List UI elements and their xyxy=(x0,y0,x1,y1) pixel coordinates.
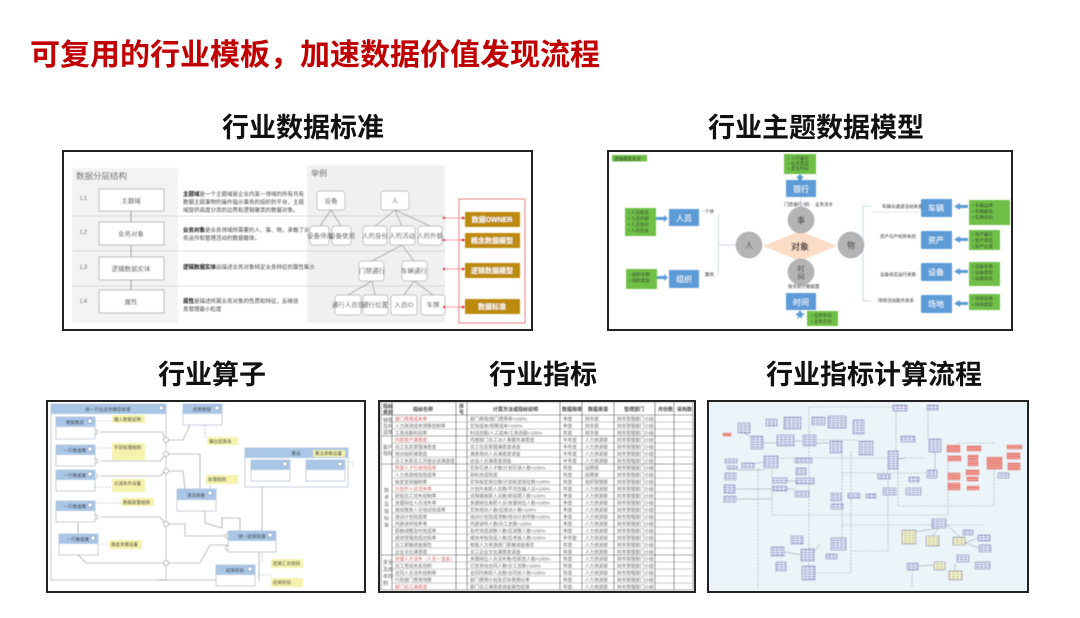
yellow notes: 算法参数设置 xyxy=(315,450,342,457)
indicator rows: 财务管理部门小组 xyxy=(617,562,654,570)
yellow notes: 维度关联设置 xyxy=(111,541,138,548)
indicator rows: 人力资源部 xyxy=(585,492,608,500)
indicator rows: 年度 xyxy=(563,478,573,486)
indicator rows: 半年度 xyxy=(563,450,577,458)
heading: 行业数据标准: 行业数据标准 xyxy=(222,113,384,143)
indicator rows: 财务管理部门小组 xyxy=(617,570,654,576)
layer structure column: L1 xyxy=(80,195,88,202)
indicator rows: 关键人才流失（人员一览表） xyxy=(395,556,455,562)
relation labels: 个体 xyxy=(705,208,714,215)
category column xyxy=(383,417,393,587)
layer descriptions: 主题域是一个主题域是企业内某一领域的所有共有 xyxy=(183,190,305,198)
green attribute notes: • 人行编号 xyxy=(788,155,809,162)
indicator rows: 财务管理部门小组 xyxy=(617,548,654,556)
indicator rows: 季度 xyxy=(563,500,573,506)
table header: 数据来源 xyxy=(588,406,608,413)
indicator rows: 财务管理部门小组 xyxy=(617,534,654,542)
red output tables xyxy=(723,433,1022,490)
green attribute notes: • 资产类型 xyxy=(972,237,993,244)
indicator rows: 合同内离职人员数/合同总人数×100% xyxy=(470,570,545,576)
indicator rows: 财务管理部门小组 xyxy=(617,422,654,430)
indicator rows: 工资总额利润率 xyxy=(395,430,428,436)
indicator rows: 财务管理部门小组 xyxy=(617,576,654,584)
indicator rows: 访谈人员满意度调查 xyxy=(470,458,512,464)
indicator rows: 行政部门费用预算 xyxy=(395,576,432,584)
indicator rows: 实际核定岗位数/计划核定岗位数×100% xyxy=(470,478,550,486)
indicator rows: 季度 xyxy=(563,416,573,422)
red connectors xyxy=(443,217,465,308)
indicator rows: 年度 xyxy=(563,464,573,472)
indicator rows: 计划外人员流失率 xyxy=(395,486,432,492)
indicator rows: 财务管理部门小组 xyxy=(617,472,654,478)
layer structure column: 数据分层结构 xyxy=(76,171,127,181)
operator boxes: 统一结果处理 xyxy=(238,533,266,540)
indicator rows: 财务部 xyxy=(585,430,599,436)
indicator rows: 绩效考核完成人数/应考核人数×100% xyxy=(470,534,545,542)
category column: 制 xyxy=(383,580,388,587)
indicator rows: 年度人才引进完成率 xyxy=(395,464,437,472)
green attribute notes: • 组织名称 xyxy=(629,271,650,278)
layer structure column: 业务对象 xyxy=(118,229,144,238)
indicator rows: 人力资源部 xyxy=(585,548,608,556)
category column: 及利 xyxy=(383,423,393,430)
layer descriptions: 域提供高度分类的边界和逻辑聚类的数据对象。 xyxy=(183,206,299,214)
relation labels: 车辆与通道活动关系 xyxy=(882,203,923,210)
indicator rows: 部门费用计划及实际费用比率 xyxy=(470,576,530,584)
table header: 数据频率 xyxy=(562,406,582,413)
green attribute notes: • 人员姓名 xyxy=(628,209,649,216)
relation labels: 门禁通行人 xyxy=(784,201,807,208)
yellow notes: 输入数据说明 xyxy=(114,416,141,423)
category column: 术 xyxy=(384,494,389,501)
operator boxes: 统一行业业务模型处理 xyxy=(86,406,131,413)
indicator rows: 继续教育人员培训完成率 xyxy=(395,506,446,514)
green attribute notes: • 设备状态 xyxy=(972,275,993,282)
indicator rows: 财务部 xyxy=(585,422,599,430)
indicator rows: 人力资源部 xyxy=(585,556,608,562)
indicator rows: 薪酬调整及时完成率 xyxy=(395,528,437,534)
blue entities: 场地 xyxy=(928,299,944,309)
indicator rows: 年度 xyxy=(563,548,573,556)
indicator rows: 年度 xyxy=(563,576,573,584)
green attribute notes: • 资产价值 xyxy=(972,243,993,250)
category column: 本控 xyxy=(383,573,393,580)
category column: 率 xyxy=(384,522,389,529)
indicator rows: 员工劳动关系控制 xyxy=(395,562,432,570)
table header: 采购数 xyxy=(677,406,692,413)
yellow notes: 字段处理规则 xyxy=(114,444,141,451)
example tree: 举例 xyxy=(311,168,327,178)
circles xyxy=(736,207,864,285)
green attribute notes: • 场地名称 xyxy=(972,295,993,302)
operator boxes: 一行数据集 xyxy=(67,536,90,543)
table nodes xyxy=(724,405,991,580)
table header: 月份数 xyxy=(658,406,673,413)
indicator rows: 人力资源部 xyxy=(585,584,608,590)
example tree: 车牌 xyxy=(426,300,440,309)
green attribute notes: • 人员住址 xyxy=(628,227,649,234)
green attribute notes: • 资产编号 xyxy=(972,231,993,238)
example tree: 设备使用 xyxy=(329,231,355,240)
indicator rows: 已签劳动合同人数/员工总数×100% xyxy=(470,562,541,570)
indicator rows: 计划外离职人员数/平均在编人员×100% xyxy=(470,486,550,492)
blue entities: 设备 xyxy=(928,267,944,277)
circles: 事 xyxy=(797,215,805,225)
indicator rows: 内部客户满意度 xyxy=(395,436,428,444)
category column: 润率 xyxy=(383,429,393,436)
yellow notes xyxy=(109,415,345,587)
indicator rows: 财务管理部门小组 xyxy=(617,464,654,472)
indicator rows: 季度 xyxy=(563,520,573,528)
indicator rows: 人力资源部 xyxy=(585,436,608,444)
panel: 行业主题数据模型 xyxy=(608,151,1012,330)
indicator rows: 核定定岗编制率 xyxy=(395,478,428,486)
indicator rows: 财务管理部门小组 xyxy=(617,444,654,450)
example tree: 通行人员信 xyxy=(332,300,365,309)
indicator rows: 内部讲师人数/员工总数×100% xyxy=(470,520,532,528)
indicator rows: 组织管理部 xyxy=(585,478,608,486)
layer structure column xyxy=(72,168,442,323)
layer descriptions: 息管理最小粒度 xyxy=(183,305,222,313)
indicator rows: 财务管理部门小组 xyxy=(617,542,654,548)
dashed lineage links xyxy=(736,407,995,588)
circles: 人 xyxy=(745,241,753,250)
example tree: 设备停用 xyxy=(307,231,333,240)
category column: 销售 xyxy=(383,417,393,424)
indicator rows: 企业文化满意度 xyxy=(395,548,428,556)
category column: 技 xyxy=(384,487,389,494)
table header xyxy=(383,403,692,416)
indicator rows: 财务管理部门小组 xyxy=(617,514,654,520)
heading: 行业指标: 行业指标 xyxy=(489,360,597,390)
operator boxes: 一行数据集 xyxy=(64,503,87,510)
indicator rows: 合同人员流失控制率 xyxy=(395,570,437,576)
indicator rows: 人力资源部 xyxy=(585,520,608,528)
indicator rows: 人力资源部 xyxy=(585,514,608,520)
indicator rows: 半年度 xyxy=(563,458,577,464)
blue entities: 人员 xyxy=(676,214,692,223)
yellow notes: 结果校验 xyxy=(273,579,291,586)
relation labels: 的 xyxy=(805,201,810,208)
indicator rows: 员工信息管理满意度 xyxy=(395,444,437,450)
model tag xyxy=(612,155,647,162)
circles: 间 xyxy=(798,273,804,281)
operator boxes: 一行数据集 xyxy=(64,472,87,479)
operator boxes: 结果数据 xyxy=(193,406,211,413)
output tags xyxy=(459,199,525,323)
indicator rows: 人力资源部 xyxy=(585,570,608,576)
indicator rows: 人力资源部 xyxy=(585,576,608,584)
indicator rows: 及时完成调整人数/应调整人数×100% xyxy=(470,528,545,534)
green attribute notes: • 业务类型 xyxy=(788,160,809,167)
output tags: 逻辑数据模型 xyxy=(471,266,513,275)
green attribute notes: • 人员年龄 xyxy=(628,215,649,222)
title: 可复用的行业模板，加速数据价值发现流程 xyxy=(30,30,600,74)
indicator rows: 人力资源部 xyxy=(585,528,608,534)
layer structure column: L3 xyxy=(80,264,88,271)
indicator rows: 财务管理部门小组 xyxy=(617,478,654,486)
indicator rows: 人力资源部 xyxy=(585,444,608,450)
panel: 行业指标 xyxy=(379,401,695,592)
indicator rows: 财务管理部门小组 xyxy=(617,520,654,528)
yellow notes: 输出结果表 xyxy=(209,438,232,445)
indicator rows: 财务管理部门小组 xyxy=(617,450,654,458)
indicator rows: 季度 xyxy=(563,528,573,534)
indicator rows: 季度 xyxy=(563,492,573,500)
indicator rows: 财务管理部门小组 xyxy=(617,416,654,422)
output tags: 概念数据模型 xyxy=(471,236,513,245)
indicator rows: 财务管理部门小组 xyxy=(617,492,654,500)
indicator rows: 招聘部 xyxy=(585,464,599,472)
indicator rows: 员工企业文化满意度调查 xyxy=(470,548,521,556)
indicator rows: 年度 xyxy=(563,556,573,562)
indicator rows: 半年度 xyxy=(563,534,577,542)
relation labels: 集体 xyxy=(705,271,714,278)
layer structure column: 属性 xyxy=(124,297,138,306)
indicator rows: 人力资源部 xyxy=(585,506,608,514)
output tags: 数据OWNER xyxy=(472,215,512,224)
indicator rows: 目标完成程度 xyxy=(470,472,498,478)
indicator rows xyxy=(395,416,654,590)
category column: 安全 xyxy=(383,559,393,566)
green attribute notes: • 场地类型 xyxy=(972,301,993,308)
example tree: 人的身份 xyxy=(362,231,388,240)
output tags: 数据标准 xyxy=(478,302,506,311)
indicator rows: 财务管理部门小组 xyxy=(617,584,654,590)
example tree: 人 xyxy=(392,197,399,205)
category column: 客户 xyxy=(383,444,393,451)
layer descriptions: 务运作和管理活动的数据载体。 xyxy=(183,234,260,242)
indicator rows: 半年度 xyxy=(563,444,577,450)
indicator rows: 财务管理部门小组 xyxy=(617,430,654,436)
indicator rows: 年度 xyxy=(563,584,573,590)
table header: 计算方法或指标说明 xyxy=(493,406,538,413)
indicator rows: 利润总额/人工成本/工资总额×100% xyxy=(470,430,542,436)
layer descriptions: 属性是描述所属业务对象的性质和特征，反映信 xyxy=(183,297,299,305)
yellow notes: 过滤条件设置 xyxy=(114,480,141,487)
table header: 序 xyxy=(459,403,464,410)
indicator rows: 关键岗位人员流失数/在职总人数×100% xyxy=(470,556,550,562)
blue entities: 资产 xyxy=(928,235,944,245)
indicator rows: 财务管理部门小组 xyxy=(617,486,654,492)
operator boxes: 数据集成 xyxy=(66,419,84,426)
indicator rows: 试用期离职人员数/新招聘人数×100% xyxy=(470,492,545,500)
operator boxes: 算法 xyxy=(292,450,301,457)
center diamond: 对象 xyxy=(791,241,809,252)
example tree: 车辆通行 xyxy=(401,266,428,275)
indicator rows: 财务管理部门小组 xyxy=(617,528,654,534)
indicator rows: 内部讲师培养率 xyxy=(395,520,428,528)
layer structure column: 逻辑数据实体 xyxy=(112,264,151,273)
relation labels: 场地活动服务关系 xyxy=(878,297,914,304)
layer structure column: L2 xyxy=(80,229,88,236)
indicator rows: 部门员工满意度调查报告结果 xyxy=(470,584,530,590)
table header: 号 xyxy=(459,409,464,416)
relation labels: 设备状态运行关联 xyxy=(880,271,916,278)
table header: 管理部门 xyxy=(624,406,644,413)
operator boxes: 结果校验 xyxy=(226,567,244,574)
indicator table grid xyxy=(381,402,693,590)
indicator rows: 财务管理部门小组 xyxy=(617,556,654,562)
indicator rows: 人力资源部 xyxy=(585,486,608,492)
indicator rows: 部门费用成本率 xyxy=(395,416,428,422)
indicator rows: 绩效管理完成达标率 xyxy=(395,534,437,542)
indicator rows: 财务管理部门小组 xyxy=(617,436,654,444)
example tree: 人的外貌 xyxy=(417,231,444,240)
indicator rows: 部门员工满意度 xyxy=(395,584,428,590)
indicator rows: 年度 xyxy=(563,570,573,576)
indicator rows: 季度 xyxy=(563,422,573,430)
table header: 指标 xyxy=(383,403,393,410)
heading: 行业主题数据模型: 行业主题数据模型 xyxy=(708,113,924,143)
blue entities: 组织 xyxy=(676,274,692,284)
green attribute notes: • 设备类型 xyxy=(972,269,993,276)
blue entities: 银行 xyxy=(793,184,809,194)
indicator rows: 年度 xyxy=(563,430,573,436)
panel: 行业指标计算流程 xyxy=(708,401,1028,592)
relation labels: 业务流水 xyxy=(815,201,833,208)
green attribute notes: • 车辆品牌 xyxy=(972,202,993,209)
indicator rows: 财务管理部门小组 xyxy=(617,506,654,514)
example tree xyxy=(307,165,445,323)
example tree: 通行位置 xyxy=(362,300,388,309)
layer structure column: 主题域 xyxy=(121,196,141,205)
circles: 时 xyxy=(798,264,804,273)
blue arrows xyxy=(656,174,968,319)
green attribute notes xyxy=(625,154,1010,326)
layer descriptions: 数据主题事物的操作指示事务的组织的平台，主题 xyxy=(183,198,305,206)
relation labels xyxy=(705,201,923,304)
indicator rows: 季度 xyxy=(563,506,573,514)
indicator rows: 关键岗位人员流失率 xyxy=(395,500,437,506)
layer descriptions xyxy=(183,190,316,313)
indicator rows: 根据人力资源部门薪酬调查报告 xyxy=(470,542,535,548)
blue entities: 车辆 xyxy=(928,203,944,213)
relation labels: 按天统计数据量 xyxy=(788,283,820,290)
category column: 标 xyxy=(384,515,389,522)
panel: 行业算子 xyxy=(47,401,365,592)
indicator rows: 招聘部 xyxy=(585,472,599,478)
indicator rows: 人力资源成本预算控制率 xyxy=(395,422,446,430)
indicator rows: 员工薪酬调查报告 xyxy=(395,542,432,548)
example tree: 入员ID xyxy=(394,301,414,309)
category column: 指 xyxy=(384,508,389,515)
indicator rows: 半年度 xyxy=(563,436,577,444)
indicator rows: 财务部 xyxy=(585,416,599,422)
indicator rows: 关键岗位离职人员/关键岗位人数×100% xyxy=(470,500,550,506)
green attribute notes: • 业务年份 xyxy=(811,312,832,319)
indicator rows: 季度 xyxy=(563,514,573,520)
green attribute notes: • 发生时间 xyxy=(788,165,809,172)
yellow notes: 处理规则 xyxy=(208,476,226,483)
green attribute notes: • 人员身份 xyxy=(628,221,649,228)
indicator rows: 财务管理部门小组 xyxy=(617,458,654,464)
indicator rows: 人力资源部 xyxy=(585,562,608,570)
layer structure column: L4 xyxy=(80,298,88,305)
operator boxes xyxy=(51,404,348,586)
model tag: 逻辑模型总览 xyxy=(614,156,641,162)
layer descriptions: 业务对象是业务领域所需要的人、事、物，承载了业 xyxy=(183,226,310,234)
green attribute notes: • 业务月份 xyxy=(811,318,832,325)
green attribute notes: • 车辆颜色 xyxy=(972,208,993,215)
center diamond xyxy=(763,231,837,261)
heading: 行业指标计算流程: 行业指标计算流程 xyxy=(766,360,982,390)
indicator rows: 实际培训人数/应培训人数×100% xyxy=(470,506,536,514)
example tree: 人的活动 xyxy=(389,231,416,240)
example tree: 门禁通行 xyxy=(359,266,386,275)
category column: 及成 xyxy=(383,566,393,573)
indicator rows: 人力资源部 xyxy=(585,450,608,458)
indicator rows: 员工信息管理满意度调查 xyxy=(470,444,521,450)
blue entities: 时间 xyxy=(793,297,809,307)
indicator rows: 培训计划完成率 xyxy=(395,514,428,520)
blue entities xyxy=(669,180,952,313)
operator boxes: 清洗转换 xyxy=(187,492,205,499)
operator boxes: 一行数据集 xyxy=(64,447,87,454)
panel: 行业数据标准 xyxy=(63,151,532,330)
operator flow lines xyxy=(51,404,353,581)
indicator rows: 人力资源部 xyxy=(585,458,608,464)
indicator rows: 年度 xyxy=(563,472,573,478)
yellow notes: 数据质量规则 xyxy=(123,499,150,506)
category column: 指标 xyxy=(383,450,393,457)
table header: 指标名称 xyxy=(413,406,433,413)
indicator rows: 实际成本/预算成本×100% xyxy=(470,422,522,430)
indicator rows: 培训计划完成项数/培训计划项数×100% xyxy=(470,514,550,520)
layer descriptions: 逻辑数据实体由描述业务对象特定业务特征的属性集合 xyxy=(183,263,316,271)
yellow notes: 结果汇总规则 xyxy=(273,560,300,567)
indicator rows: 员工关系员工开放访谈满意度 xyxy=(395,458,455,464)
indicator rows: 人力资源部 xyxy=(585,534,608,542)
table header: 类别 xyxy=(383,409,393,416)
relation labels: 资产与产权所有权 xyxy=(880,233,916,240)
circles: 物 xyxy=(847,240,855,250)
indicator rows: 部门费用/部门费用率×100% xyxy=(470,416,527,422)
connector lines xyxy=(702,197,919,301)
indicator rows: 实际引进人才数/计划引进人数×100% xyxy=(470,464,545,472)
indicator rows: 新招员工流失控制率 xyxy=(395,492,437,500)
category column: 及 xyxy=(384,502,389,508)
indicator rows: 年度 xyxy=(563,486,573,492)
indicator rows: 培训组织满意度 xyxy=(395,450,428,458)
indicator rows: 年度 xyxy=(563,562,573,570)
indicator rows: 年度 xyxy=(563,542,573,548)
heading: 行业算子: 行业算子 xyxy=(158,360,266,390)
green attribute notes: • 车牌号码 xyxy=(972,214,993,221)
indicator rows: 财务管理部门小组 xyxy=(617,500,654,506)
green attribute notes: • 设备名称 xyxy=(972,263,993,270)
green attribute notes: • 组织类型 xyxy=(629,277,650,284)
indicator rows: 内部部门员工对人事服务满意度 xyxy=(470,436,535,444)
indicator rows: 人力资源规划完成率 xyxy=(395,472,437,478)
indicator rows: 人力资源部 xyxy=(585,542,608,548)
indicator rows: 人力资源部 xyxy=(585,500,608,506)
example tree: 设备 xyxy=(324,196,338,205)
indicator rows: 满意培训人员满意度调查 xyxy=(470,450,521,458)
